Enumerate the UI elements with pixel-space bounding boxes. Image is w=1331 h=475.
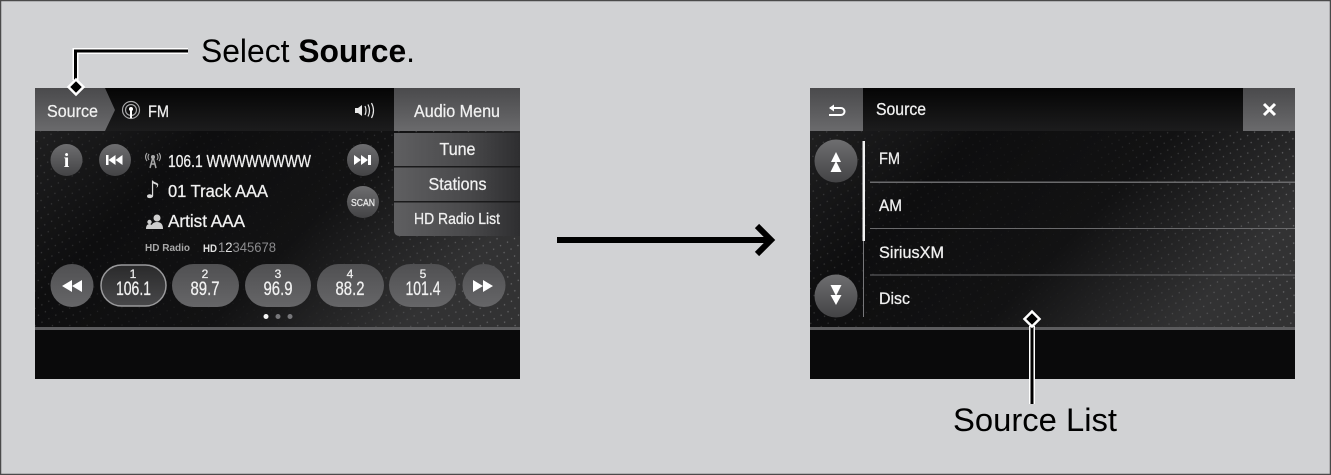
audio menu button: Audio Menu	[414, 101, 500, 121]
station info: 106.1 WWWWWWWW	[168, 151, 311, 171]
page indicator dots	[264, 314, 292, 319]
callout: source list: Source List	[953, 402, 1117, 438]
icon: music note: ♪	[145, 176, 160, 204]
item: AM: AM	[879, 196, 902, 215]
station info	[145, 151, 311, 255]
previous track button	[99, 144, 131, 176]
next track button	[347, 144, 379, 176]
scroll bar	[862, 141, 865, 317]
preset 3: 3	[275, 267, 282, 281]
preset 1 selected: 106.1	[116, 279, 151, 300]
preset 5: 101.4	[406, 279, 441, 300]
current band: FM	[148, 102, 169, 121]
scan button	[347, 186, 379, 218]
info button	[50, 144, 82, 176]
source tab	[35, 88, 115, 131]
station info: 01 Track AAA	[168, 181, 268, 201]
info button: i	[64, 150, 70, 172]
side menu: Tune	[440, 139, 476, 159]
preset 3	[245, 264, 311, 307]
source tab: Source	[47, 101, 98, 121]
side menu: HD Radio List	[414, 211, 500, 228]
preset 2: 2	[202, 267, 209, 281]
item: SiriusXM: SiriusXM	[879, 243, 944, 262]
screen title: Source	[876, 99, 926, 119]
preset 3: 96.9	[264, 279, 292, 300]
side menu	[394, 133, 520, 236]
rewind button	[50, 264, 94, 307]
callout: select source	[68, 33, 415, 94]
scan button: SCAN	[351, 198, 375, 209]
audio menu button	[394, 88, 520, 131]
preset 4	[317, 264, 384, 307]
icon: volume	[355, 103, 374, 118]
icon: antenna	[146, 153, 160, 168]
preset 4: 4	[347, 267, 354, 281]
station info: Artist AAA	[168, 211, 245, 231]
item: FM: FM	[879, 149, 900, 168]
back button	[810, 88, 863, 131]
panel: source list screen	[810, 88, 1295, 379]
item: Disc: Disc	[879, 289, 910, 308]
close button	[1243, 88, 1295, 131]
side menu: Stations	[428, 174, 487, 194]
source list	[870, 149, 1295, 308]
callout: source list	[953, 312, 1117, 438]
HD multicast channels: HD	[203, 243, 217, 255]
preset 4: 88.2	[336, 279, 364, 300]
arrow	[557, 226, 772, 254]
HD radio logo: HD Radio	[145, 242, 190, 254]
preset 1 selected	[101, 265, 166, 306]
preset 5	[389, 264, 456, 307]
preset 5: 5	[420, 267, 427, 281]
preset 2	[172, 264, 239, 307]
callout: select source: Select Source.	[201, 33, 415, 69]
station info: 12345678	[218, 239, 276, 255]
panel: audio screen	[35, 88, 520, 379]
preset 2: 89.7	[190, 279, 220, 300]
preset 1 selected: 1	[130, 267, 137, 281]
icon: artist	[146, 214, 163, 229]
scroll down button	[814, 274, 858, 318]
fast forward button	[462, 264, 506, 307]
icon: FM source	[122, 102, 140, 118]
scroll up button	[814, 140, 858, 182]
